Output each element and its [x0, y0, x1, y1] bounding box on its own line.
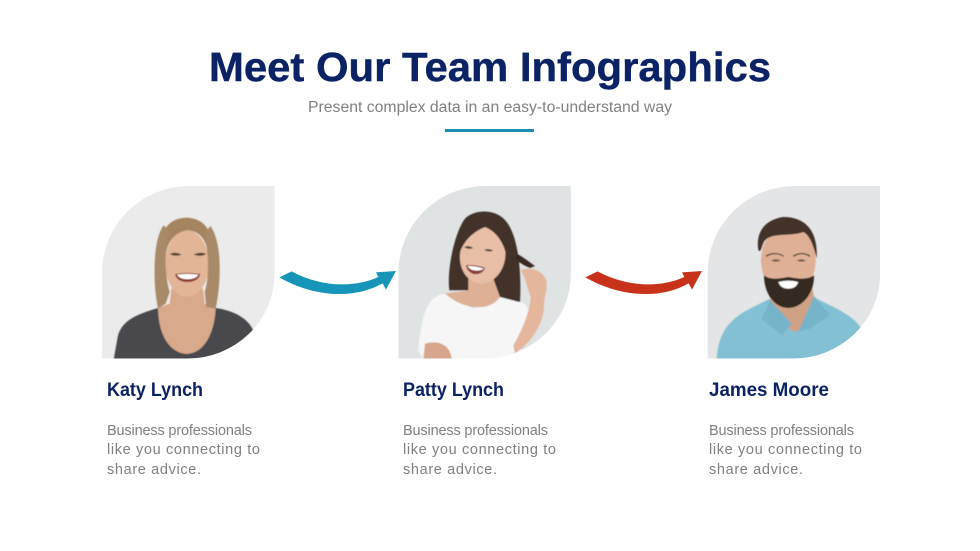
description: Patty Lynch: Business professionals [403, 423, 548, 439]
name: Patty Lynch: Patty Lynch [403, 380, 504, 401]
title underline [445, 129, 534, 132]
name: James Moore: James Moore [709, 380, 829, 401]
description: Patty Lynch: share advice. [403, 462, 497, 478]
portrait: Katy Lynch [102, 186, 274, 359]
subtitle: Present complex data in an easy-to-understand way [308, 99, 672, 116]
panel: Patty Lynch [398, 186, 571, 478]
description: Katy Lynch: Business professionals [107, 423, 252, 439]
portrait: Patty Lynch [398, 186, 571, 359]
description: James Moore: share advice. [709, 462, 803, 478]
arrow: red [585, 271, 702, 294]
portrait: James Moore [708, 186, 880, 359]
panel: Katy Lynch [102, 186, 274, 478]
description: James Moore [709, 423, 862, 478]
title: Meet Our Team Infographics [209, 44, 771, 90]
description: Patty Lynch: like you connecting to [403, 442, 556, 458]
name: Katy Lynch: Katy Lynch [107, 380, 203, 401]
arrow: teal [279, 271, 396, 294]
description: James Moore: Business professionals [709, 423, 854, 439]
description: Katy Lynch: like you connecting to [107, 442, 260, 458]
panel: James Moore [708, 186, 880, 478]
description: Katy Lynch [107, 423, 260, 478]
description: Patty Lynch [403, 423, 556, 478]
description: Katy Lynch: share advice. [107, 462, 201, 478]
description: James Moore: like you connecting to [709, 442, 862, 458]
